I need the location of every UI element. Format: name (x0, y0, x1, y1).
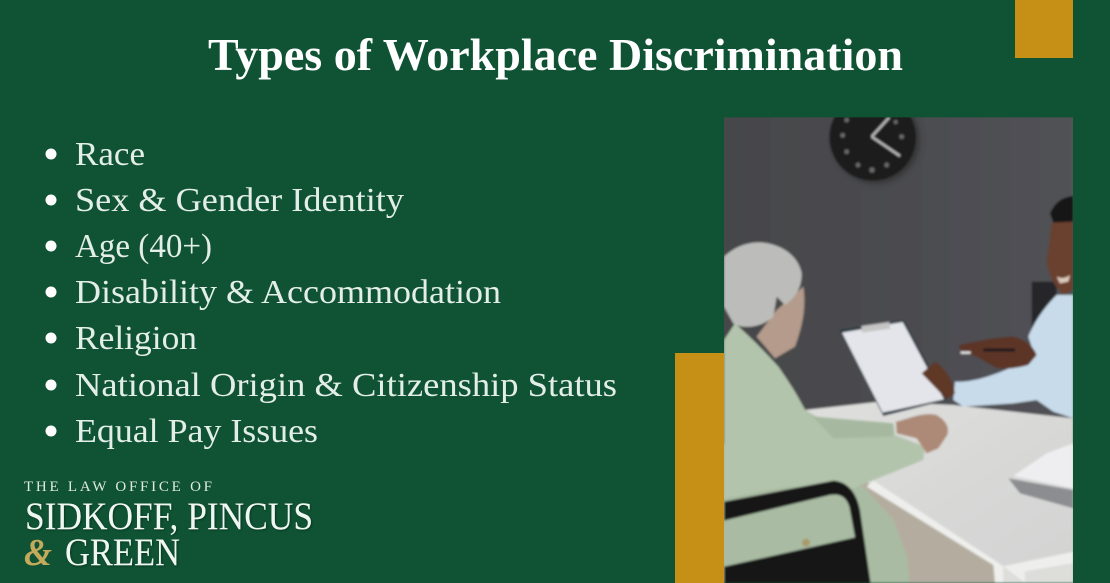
woman: hands (896, 414, 948, 453)
woman: hair (724, 242, 802, 327)
woman: jacket (724, 323, 925, 498)
gold accent: top right (1015, 0, 1073, 58)
logo: ampersand: & (24, 532, 52, 574)
item: national origin: National Origin & Citizenship Status (75, 367, 617, 404)
woman: trousers (724, 483, 909, 583)
item: religion: Religion (75, 320, 197, 357)
clock (828, 117, 921, 185)
item: disability: Disability & Accommodation (75, 274, 501, 311)
logo: the law office of: THE LAW OFFICE OF (24, 479, 212, 495)
wall (720, 110, 1080, 443)
title: Types of Workplace Discrimination (208, 30, 903, 80)
table (805, 402, 1073, 566)
clipboard (839, 320, 947, 416)
gold accent: beside photo (675, 353, 724, 583)
bullet list (46, 136, 617, 450)
woman: neck and face (757, 287, 804, 358)
floor and under-table area (720, 443, 1080, 583)
photo: meeting at a desk (720, 94, 1080, 583)
item: race (46, 136, 145, 173)
man: hand and pen (958, 337, 1037, 369)
man: lower hand (922, 362, 955, 399)
item: race: Race (75, 136, 145, 173)
man: shirt (953, 295, 1073, 418)
man: face (1047, 218, 1073, 295)
logo: green: GREEN (65, 531, 180, 574)
logo: firm name: SIDKOFF, PINCUS (25, 495, 313, 538)
dark frame behind man (1031, 281, 1058, 327)
wheelchair (724, 481, 871, 583)
logo (24, 479, 313, 574)
notebook and laptop (1008, 478, 1073, 508)
item: sex and gender identity: Sex & Gender Identity (75, 182, 404, 219)
item: equal pay: Equal Pay Issues (75, 413, 318, 450)
item: age: Age (40+) (75, 228, 212, 265)
